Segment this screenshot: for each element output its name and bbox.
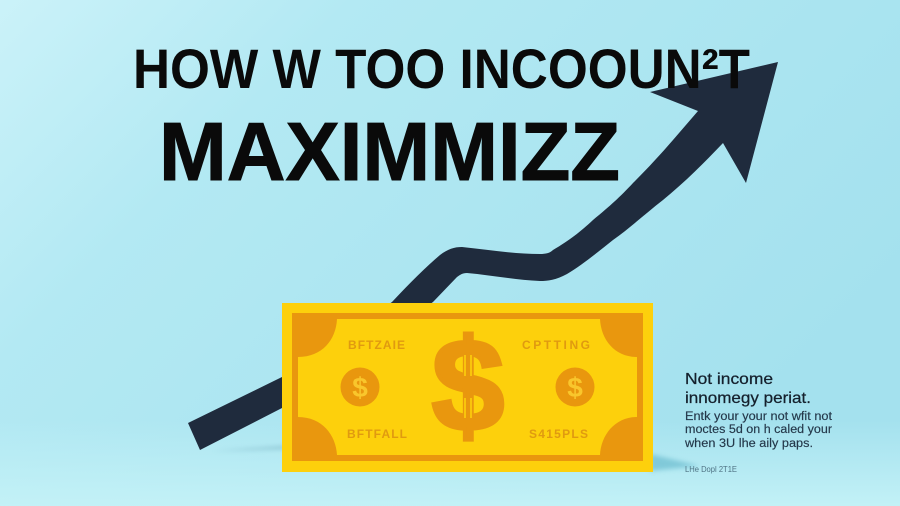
title [133, 37, 750, 198]
note body [684, 411, 833, 450]
bill inner border [292, 313, 643, 461]
note body: Entk your your not wfit not [685, 411, 833, 423]
shadows [212, 446, 700, 471]
note heading [685, 371, 811, 407]
title line 2: MAXIMMIZZ [159, 105, 620, 198]
side note [684, 371, 833, 474]
left coin: $ [352, 372, 368, 403]
note body: moctes 5d on h caled your [685, 424, 832, 436]
right coin [556, 368, 594, 406]
note heading: innomegy periat. [685, 390, 811, 407]
note footer: LHe Dopl 2T1E [685, 465, 737, 474]
arrow [188, 62, 778, 450]
bill small labels: BFTZAIE [348, 338, 405, 352]
central dollar sign: $ [432, 312, 504, 458]
bill small labels: CPTTING [522, 338, 590, 352]
bill small labels: BFTFALL [347, 427, 407, 441]
title line 1: HOW W TOO INCOOUN²T [133, 37, 750, 100]
note body: when 3U lhe aily paps. [684, 438, 813, 450]
bill small labels [347, 338, 590, 441]
note heading: Not income [685, 371, 773, 388]
dollar bill [282, 303, 653, 472]
bill small labels: S415PLS [529, 427, 588, 441]
left coin [340, 368, 380, 406]
right coin: $ [567, 372, 583, 403]
